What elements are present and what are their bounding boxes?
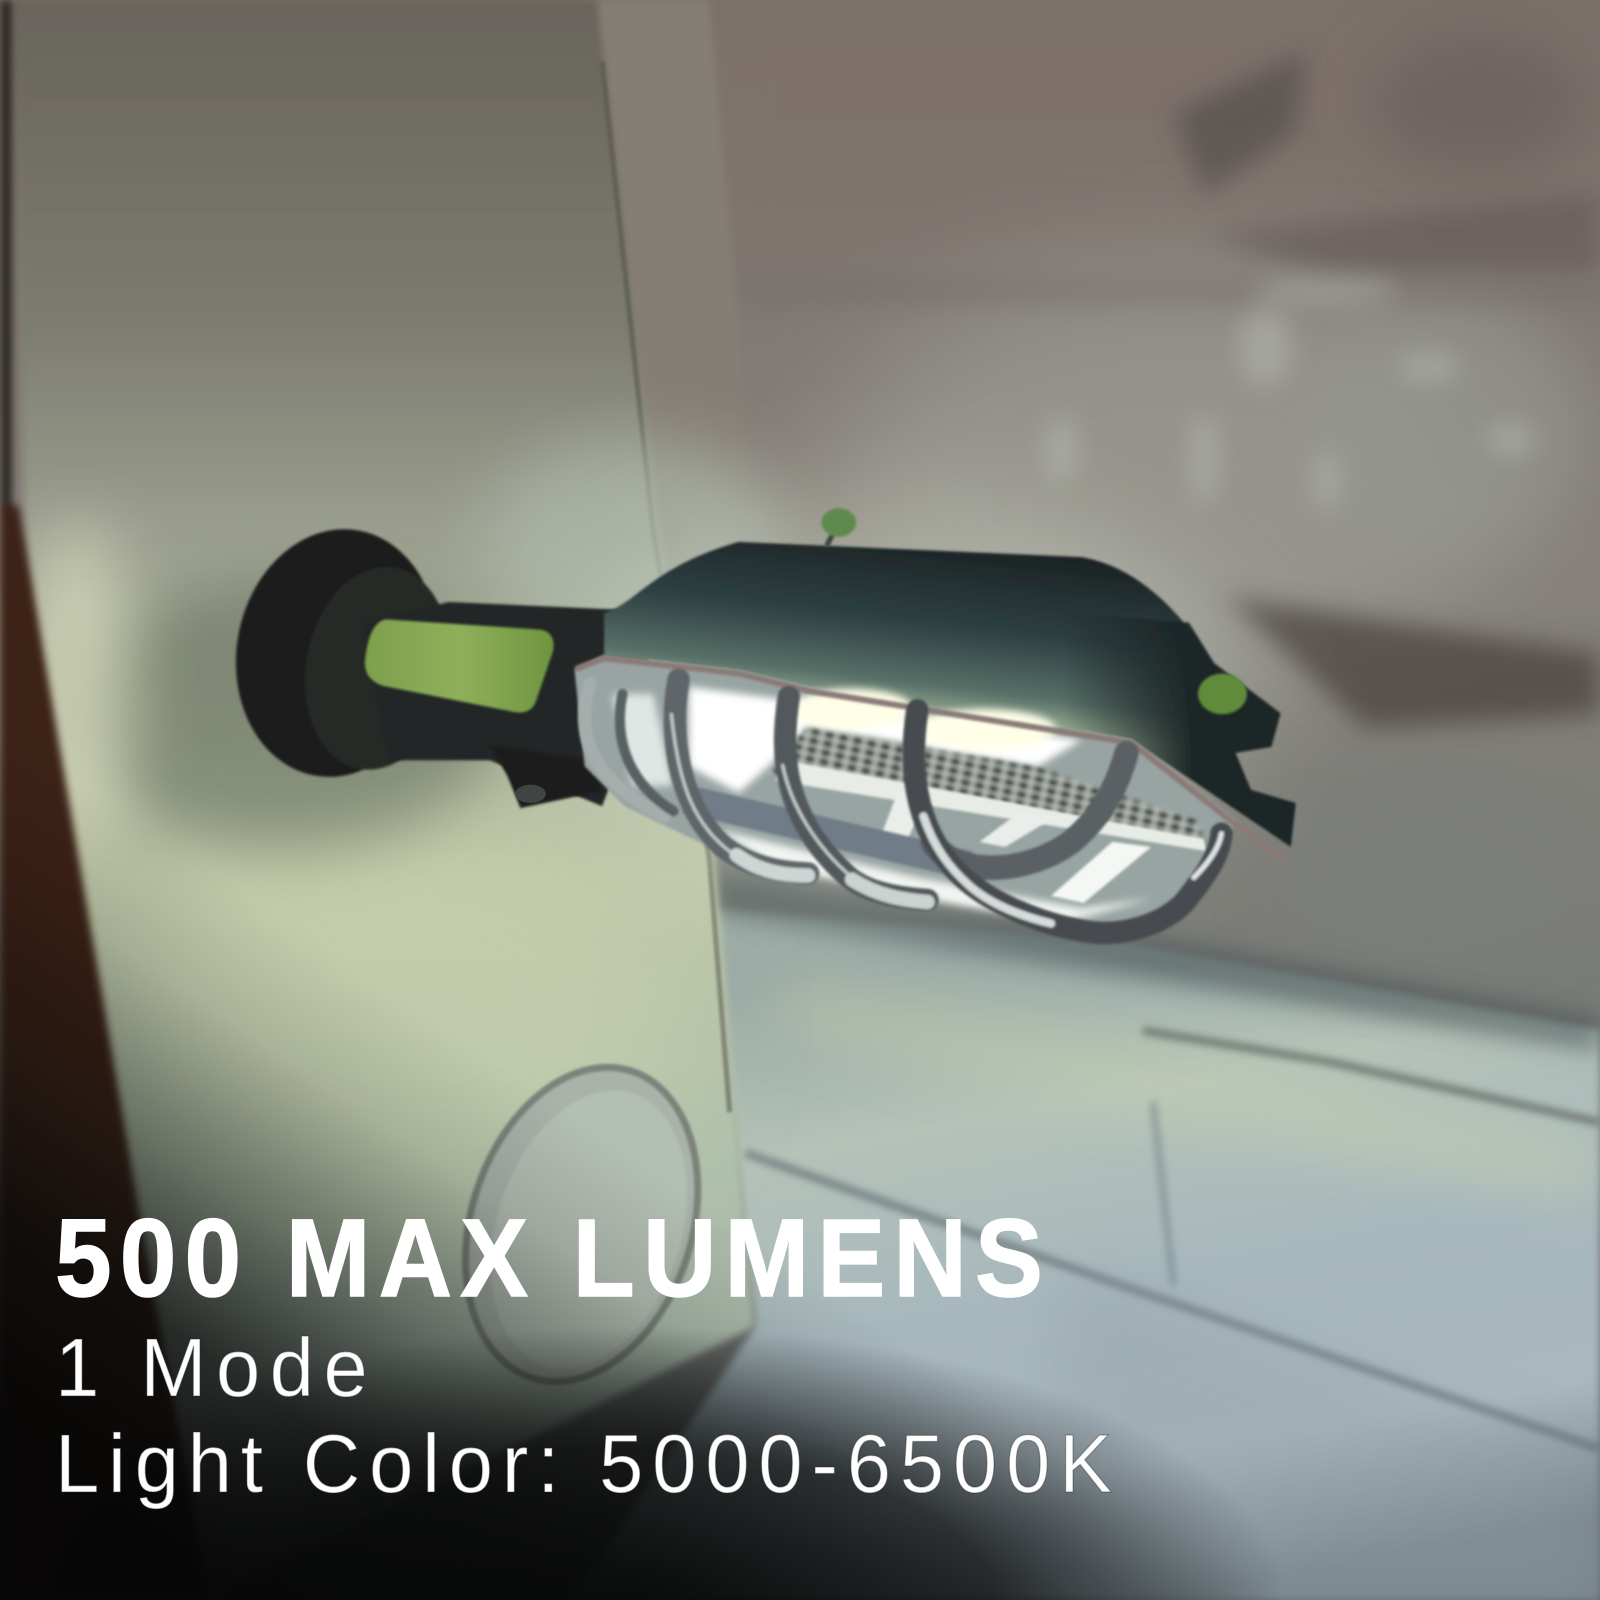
lower ledge bbox=[571, 908, 1600, 1600]
top clip bbox=[821, 508, 856, 546]
ring 3 bbox=[914, 710, 1221, 933]
big inner band bbox=[933, 753, 1127, 868]
housing bbox=[604, 542, 1296, 847]
side button bbox=[1198, 673, 1247, 714]
handle bbox=[362, 602, 653, 806]
LED panels bbox=[612, 687, 1206, 923]
background: concrete pillar bbox=[15, 0, 786, 1600]
horizontal bar bbox=[686, 799, 969, 865]
subtext: mode: 1 Mode bbox=[55, 1322, 368, 1414]
work light lamp bbox=[217, 508, 1296, 934]
background: left dark edge bbox=[0, 0, 209, 1600]
ring 1 bbox=[675, 680, 808, 873]
ring 2 bbox=[785, 697, 928, 900]
electrical box knockout circle bbox=[427, 1037, 736, 1412]
chrome cage bbox=[578, 658, 1284, 933]
magnetic base bbox=[217, 513, 466, 793]
green grip bbox=[365, 619, 554, 713]
switch bbox=[490, 745, 602, 808]
subtext: light color: Light Color: 5000-6500K bbox=[55, 1418, 1112, 1510]
lens interior bbox=[574, 655, 1236, 934]
lamp glow bbox=[571, 510, 1224, 898]
headline: 500 MAX LUMENS bbox=[55, 1197, 1043, 1320]
